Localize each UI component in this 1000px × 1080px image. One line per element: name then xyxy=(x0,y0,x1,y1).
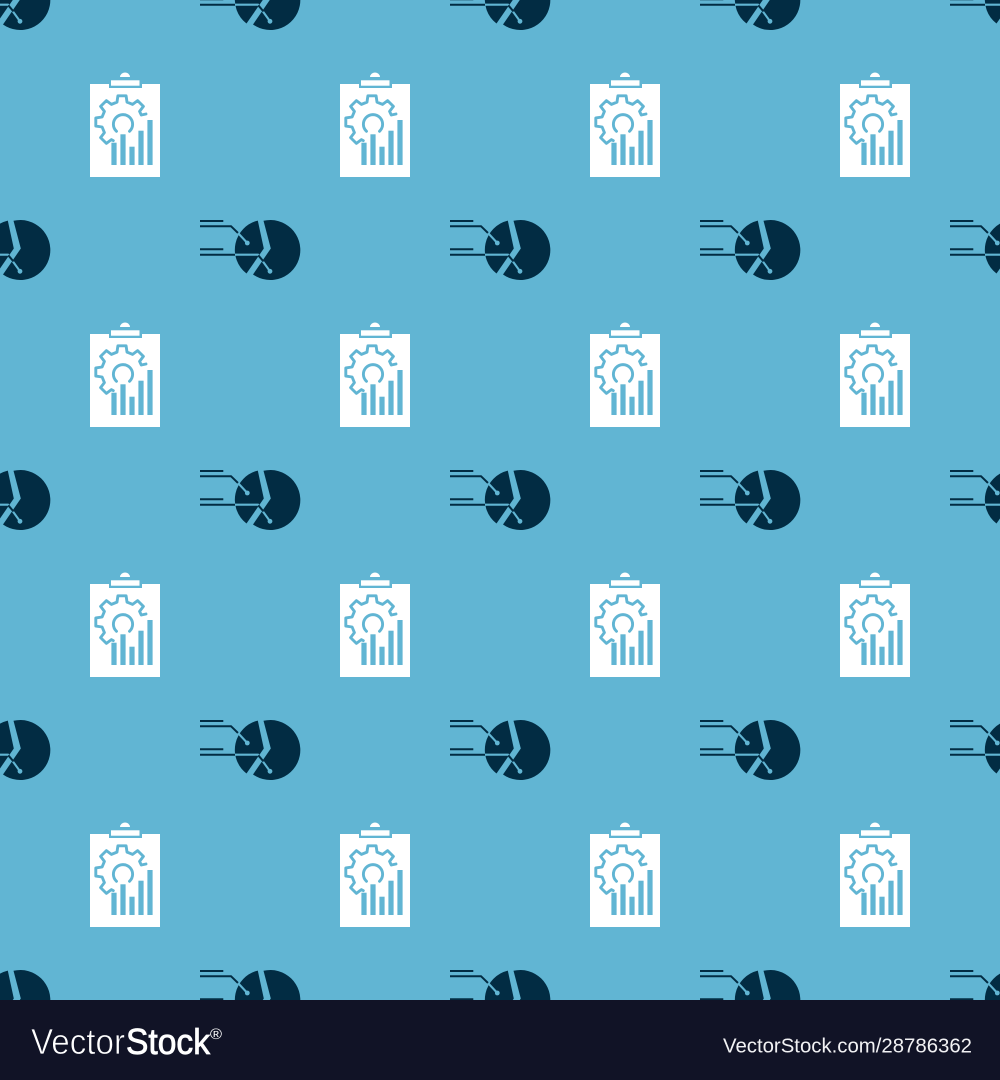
panel: footer bar xyxy=(0,1000,1000,1080)
image id text: VectorStock.com/28786362 xyxy=(723,1036,972,1058)
logo wordmark: Stock xyxy=(126,1021,211,1062)
icon: pie chart row 4 xyxy=(0,720,1000,780)
icon: pie chart row 1 xyxy=(0,0,1000,30)
logo wordmark xyxy=(31,1021,222,1062)
icon: clipboard row 1 xyxy=(90,72,910,177)
icon: clipboard row 3 xyxy=(90,572,910,677)
logo wordmark: ® xyxy=(210,1026,222,1043)
icon: pie chart row 5 xyxy=(0,970,1000,1030)
icon: clipboard row 2 xyxy=(90,322,910,427)
icon: clipboard row 4 xyxy=(90,822,910,927)
icon: pie chart row 2 xyxy=(0,220,1000,280)
icon: pie chart row 3 xyxy=(0,470,1000,530)
logo wordmark: Vector xyxy=(31,1021,125,1062)
